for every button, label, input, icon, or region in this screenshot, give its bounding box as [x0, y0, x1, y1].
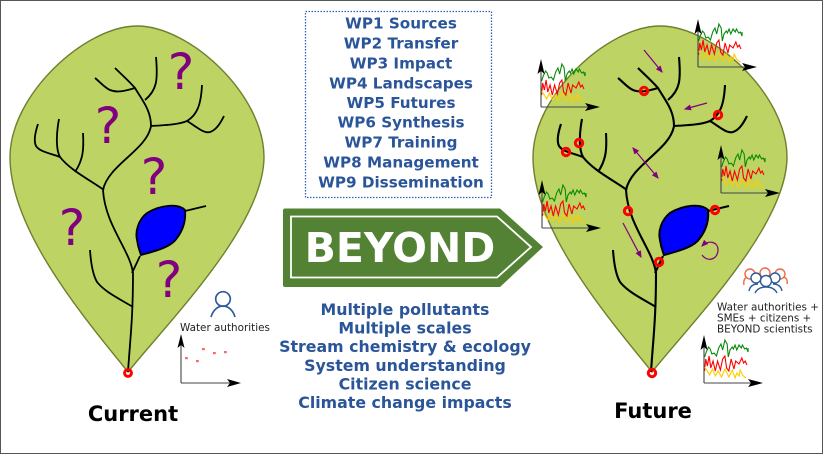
sparse scatter chart	[178, 334, 241, 387]
heading: current: Current	[88, 402, 178, 426]
work package box: WP3 Impact	[350, 54, 452, 72]
label: stakeholders	[717, 302, 819, 336]
time series chart: upper left	[538, 59, 600, 111]
question marks: ?	[168, 43, 194, 101]
stream network	[558, 57, 747, 372]
leaf-shaped catchment area	[533, 26, 787, 372]
label: stakeholders: Water authorities +	[717, 302, 819, 314]
stream network	[35, 57, 224, 372]
question marks: ?	[141, 148, 167, 206]
lake	[136, 206, 185, 255]
time series chart: right	[718, 145, 780, 197]
question marks: ?	[59, 199, 85, 257]
lake	[659, 206, 708, 255]
time series chart: lower left	[538, 180, 601, 232]
question marks: ?	[156, 251, 182, 309]
work package box: WP8 Management	[323, 154, 479, 172]
work package box: WP9 Dissemination	[318, 174, 484, 192]
work package box: WP4 Landscapes	[329, 74, 473, 92]
work package box	[306, 12, 492, 198]
project themes list: Climate change impacts	[298, 393, 512, 412]
project themes list: System understanding	[304, 356, 506, 375]
time series chart: bottom right	[700, 335, 763, 387]
catchment: future	[533, 26, 787, 377]
project themes list: Multiple pollutants	[321, 300, 489, 319]
project themes list: Multiple scales	[338, 318, 472, 338]
monitoring points	[562, 87, 722, 377]
process arrows	[623, 50, 718, 259]
time series chart: top right	[694, 19, 757, 71]
label: stakeholders: SMEs + citizens +	[717, 312, 811, 324]
heading: future: Future	[614, 399, 692, 423]
group icon: stakeholders	[744, 268, 787, 293]
work package box: WP7 Training	[344, 134, 458, 152]
BEYOND road sign arrow: BEYOND	[305, 224, 495, 272]
work package box: WP5 Futures	[346, 94, 456, 112]
work package box: WP1 Sources	[345, 14, 457, 32]
question marks: ?	[95, 97, 121, 155]
leaf-shaped catchment area	[10, 26, 264, 372]
BEYOND road sign arrow	[283, 208, 543, 287]
question marks	[59, 43, 194, 309]
label: stakeholders: BEYOND scientists	[717, 324, 813, 336]
monitoring point	[125, 370, 131, 376]
label: water authorities: Water authorities	[180, 322, 270, 334]
project themes list: Stream chemistry & ecology	[279, 337, 532, 356]
project themes list: Citizen science	[339, 374, 471, 394]
person icon	[211, 292, 235, 317]
work package box: WP2 Transfer	[344, 34, 459, 52]
project themes list	[279, 300, 532, 412]
work package box: WP6 Synthesis	[337, 114, 465, 132]
catchment: current	[10, 26, 264, 376]
